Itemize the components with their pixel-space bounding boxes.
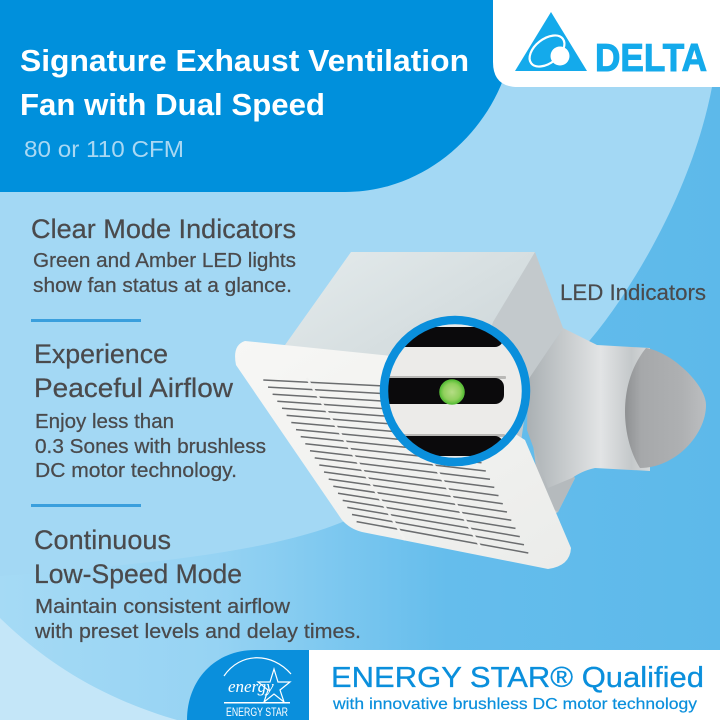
feature: clear mode indicators: Clear Mode Indicators	[31, 214, 296, 244]
title: Signature Exhaust Ventilation	[20, 43, 469, 78]
subtitle: 80 or 110 CFM	[24, 136, 184, 162]
feature: continuous low-speed mode	[34, 525, 361, 643]
LED callout label: LED Indicators	[560, 280, 706, 305]
energy star badge: ENERGY STAR	[226, 707, 288, 719]
icon: Delta triangle	[515, 12, 587, 73]
feature: peaceful airflow: Experience	[34, 339, 168, 369]
feature: peaceful airflow: Peaceful Airflow	[34, 373, 234, 403]
feature: continuous low-speed mode: with preset levels and delay times.	[34, 621, 361, 643]
feature: clear mode indicators	[31, 214, 296, 297]
feature: continuous low-speed mode: Continuous	[34, 525, 171, 555]
feature: continuous low-speed mode: Low-Speed Mode	[34, 559, 242, 589]
logo wordmark: DELTA	[595, 37, 707, 80]
energy star heading: ENERGY STAR® Qualified	[331, 662, 704, 694]
energy star subheading: with innovative brushless DC motor technology	[332, 696, 697, 713]
logo panel: Delta	[493, 0, 720, 87]
feature: peaceful airflow: DC motor technology.	[35, 460, 237, 482]
title: Fan with Dual Speed	[20, 87, 325, 122]
feature: peaceful airflow: 0.3 Sones with brushless	[35, 436, 266, 458]
feature: peaceful airflow	[34, 339, 266, 482]
feature: peaceful airflow: Enjoy less than	[35, 411, 174, 433]
LED magnifier	[370, 320, 526, 462]
feature: clear mode indicators: show fan status at a glance.	[33, 275, 292, 297]
feature: continuous low-speed mode: Maintain consistent airflow	[35, 596, 291, 618]
grille slats	[263, 378, 528, 553]
header banner	[0, 0, 503, 192]
feature: clear mode indicators: Green and Amber LED lights	[33, 250, 296, 272]
icon: green LED	[440, 380, 464, 404]
energy star banner	[187, 650, 720, 720]
duct and dome	[527, 328, 706, 488]
title	[20, 43, 469, 122]
product: exhaust fan	[235, 252, 706, 569]
energy star badge: energy	[228, 677, 274, 696]
energy star badge	[187, 650, 309, 720]
grille plate	[235, 341, 571, 569]
fan housing	[285, 252, 575, 520]
